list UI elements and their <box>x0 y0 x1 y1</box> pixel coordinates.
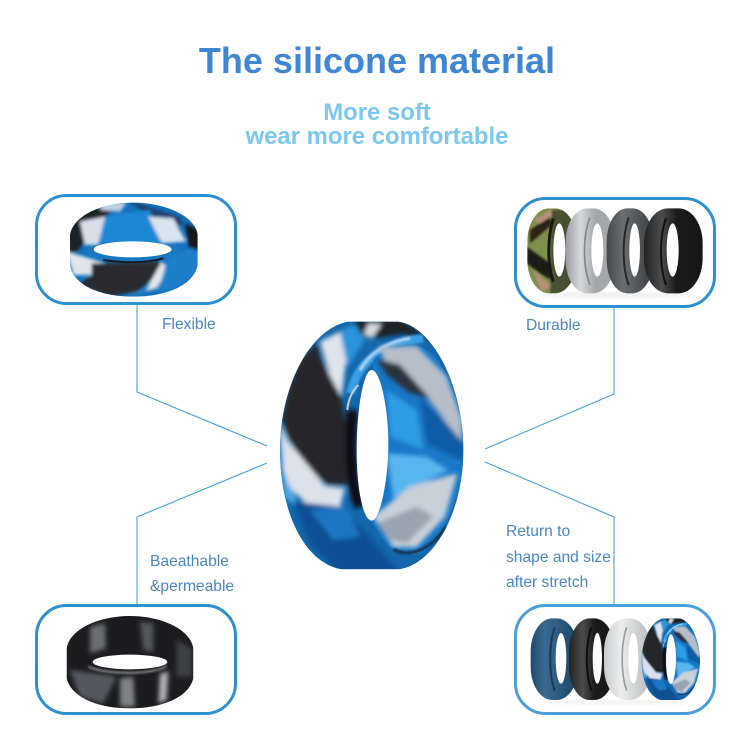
label: Durable <box>526 317 581 334</box>
icon: black ring <box>66 616 194 708</box>
label: Baeathable <box>150 553 229 570</box>
panel frame <box>36 196 236 304</box>
label: Flexible <box>162 316 216 333</box>
panel frame <box>516 198 714 306</box>
label: shape and size <box>506 549 611 566</box>
icon: four rings <box>531 617 702 704</box>
label <box>150 553 234 595</box>
label: after stretch <box>506 574 588 591</box>
title: The silicone material <box>199 40 555 81</box>
swirl ring <box>640 617 702 701</box>
ring hole <box>357 370 388 521</box>
reflection <box>542 700 688 704</box>
panel: durable <box>516 198 714 334</box>
subtitle: More soft <box>323 99 431 126</box>
subtitle <box>245 99 508 150</box>
black ring <box>569 618 615 700</box>
icon: four rings <box>527 208 703 298</box>
central swirl ring <box>273 317 470 573</box>
navy ring <box>531 618 578 700</box>
panel: flexible <box>36 196 236 333</box>
camo ring <box>527 208 572 294</box>
panel frame <box>36 606 236 714</box>
light gray ring <box>604 618 652 700</box>
label: &permeable <box>150 578 234 595</box>
inner band <box>373 345 464 555</box>
label: Return to <box>506 523 570 540</box>
subtitle: wear more comfortable <box>245 123 508 150</box>
panel frame <box>516 606 714 714</box>
panel: breathable <box>36 553 236 714</box>
reflection <box>538 292 692 298</box>
charcoal ring <box>607 208 653 293</box>
silver ring <box>566 208 615 293</box>
black ring <box>644 208 703 293</box>
panel: return to shape <box>506 523 714 714</box>
connector lines <box>137 305 614 604</box>
label <box>506 523 611 591</box>
icon: swirl ring <box>67 200 200 300</box>
